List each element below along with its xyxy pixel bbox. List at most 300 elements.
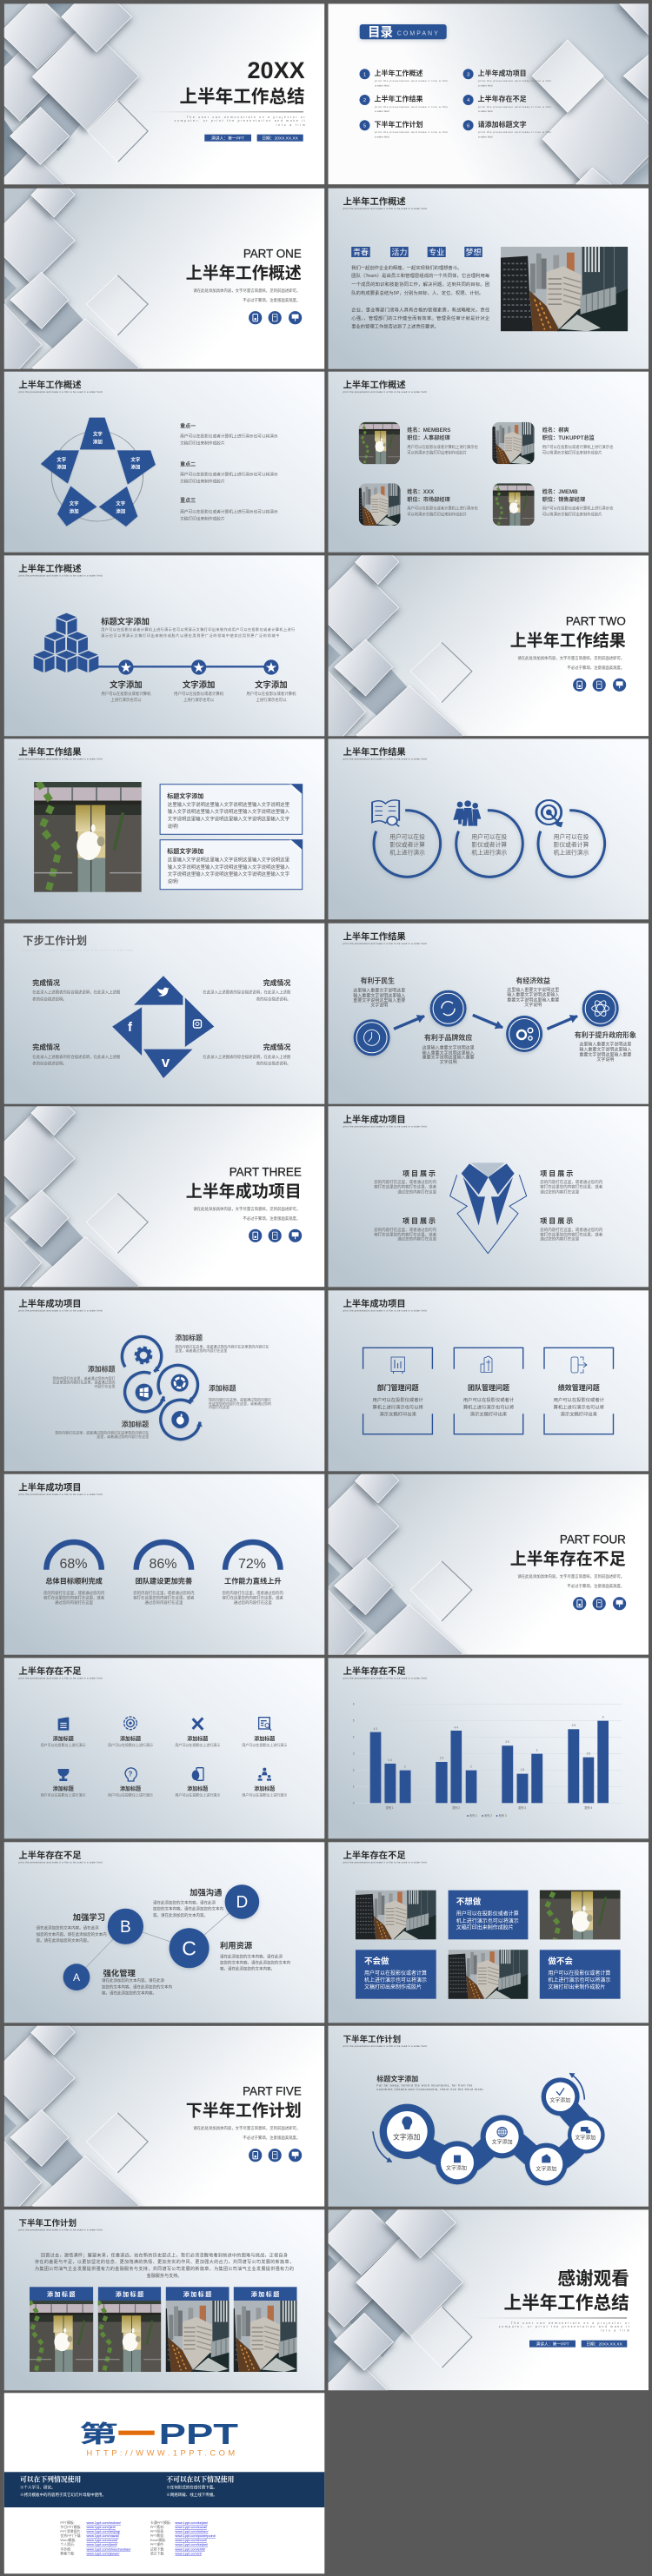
heading: print the presentation and make it a film to be used in a wider field <box>23 948 134 951</box>
panel: linked rings slide <box>4 1290 324 1471</box>
member details: 用户可以在投影仪或者计算机上进行演示也 <box>407 506 479 511</box>
icon titles <box>53 1735 275 1792</box>
flow labels: 输入重要文字说明这里输入 <box>507 992 559 998</box>
flow labels: 有利于品牌效应 <box>424 1033 472 1042</box>
contents items: print the presentation and make it into a film <box>375 105 448 109</box>
card text <box>373 1383 605 1417</box>
part heading: 上半年成功项目 <box>186 1181 302 1201</box>
background <box>329 924 649 1104</box>
heading: 上半年工作概述 <box>19 379 82 390</box>
gauge titles: 工作能力直线上升 <box>224 1577 282 1586</box>
circle labels: 加强沟通 <box>190 1887 223 1897</box>
resource links: PPT素材: <box>150 2525 164 2529</box>
resource links: 教案下载: <box>60 2551 75 2555</box>
contents items: 上半年成功项目 <box>478 69 527 77</box>
heading <box>19 1850 103 1864</box>
suit illustration <box>450 1162 527 1254</box>
resource links: www.1ppt.com/zt/ <box>175 2551 203 2555</box>
status text: 完成情况 <box>32 1043 60 1051</box>
intro paragraph: 为集团公司油气主业发展提供强有力的金融服务与支持，共同谱写公司发展的新篇章，为集团公司油气主业发展提供强有力的 <box>35 2266 294 2272</box>
blue card: 不会做: 用户可以在投影仪或者计算 <box>364 1970 427 1977</box>
gauge titles: 总体目标顺利完成 <box>45 1577 103 1586</box>
panel: three rings slide <box>329 738 649 919</box>
ring labels: 这里，或者通过您的内容打在这里 <box>96 1434 149 1439</box>
text box one: 标题文字添加 <box>167 792 203 799</box>
cover year: 20XX <box>248 57 305 83</box>
key points text: 用户可以在投影仪或者计算机上进行演示也可以将演示 <box>180 434 278 440</box>
presenter badges: 日期：20XX.XX.XX <box>262 136 299 141</box>
flow labels: 输入重要文字说明这里输入 <box>579 1047 631 1053</box>
blue card: 做不会: 机上进行演示也可以将演示 <box>548 1977 610 1983</box>
path text: Far far away, behind the word mountains, far from the <box>376 2084 472 2088</box>
part heading <box>510 614 626 650</box>
heading: 下半年工作计划 <box>19 2218 77 2228</box>
circle labels: 请在此添加您的文本内容。请在此添 <box>220 1953 283 1959</box>
contents items: 上半年工作结果 <box>374 95 422 103</box>
heading <box>19 1298 103 1312</box>
pentagon chart: 文字 <box>130 456 141 463</box>
blue card: 做不会: 做不会 <box>548 1957 573 1967</box>
keyword tags: 青春 <box>353 247 369 256</box>
member details: 可以将演示文稿打印出来制作成胶片 <box>542 511 602 518</box>
blue card: 做不会: 用户可以在投影仪或者计算 <box>548 1970 610 1977</box>
gauge descriptions: 容打在这里您的内容打在这里，或者 <box>43 1595 105 1601</box>
project text: 容打在这里您的内容打在这里，或者 <box>374 1184 437 1190</box>
blue card: 不会做: 机上进行演示也可以将演示 <box>364 1977 427 1983</box>
circle labels: 加您的文本内容。请在此添加您的文本内 <box>220 1960 290 1966</box>
ring text: 用户可以在投 <box>554 832 589 840</box>
key points text: 重点一 <box>180 422 196 429</box>
circle labels: 请在此添加您的文本内容。请在此添 <box>37 1925 99 1931</box>
contents items: 上半年存在不足 <box>478 95 527 103</box>
heading: print the presentation and make it a film to be used in a wider field <box>343 1308 427 1312</box>
gauge values <box>59 1557 266 1572</box>
heading: 上半年工作结果 <box>19 746 82 758</box>
heading: 上半年工作概述 <box>343 379 406 390</box>
cubes text: 标题文字添加 <box>101 617 150 626</box>
card text: 算机上进行演示也可以将 <box>463 1403 515 1410</box>
presenter badges <box>529 2341 627 2348</box>
part icons <box>249 311 302 324</box>
diamond background <box>309 2188 649 2424</box>
pentagon chart: 添加 <box>70 507 79 514</box>
part description: 不必过于繁琐，注意版面美观度。 <box>243 1215 300 1222</box>
timeline labels: 用户可以在投影仪或者计算机 <box>174 691 224 697</box>
background <box>329 189 649 369</box>
bar chart <box>353 1703 622 1810</box>
usage band: ※拷贝模板中的内容用于其它幻灯片母版中使用。 <box>20 2492 106 2498</box>
flow labels: 这里输入重要文字说明这里 <box>353 987 405 994</box>
panel: winding path slide <box>329 2026 649 2207</box>
icon grid: ? <box>129 1771 133 1778</box>
flow labels: 这里输入重要文字说明这里 <box>579 1042 631 1048</box>
contents items: 6 <box>467 123 469 129</box>
diamond background <box>0 0 324 218</box>
status text: 在此录入上述图表的综合描述说明，在此录入上述图 <box>203 1054 291 1060</box>
heading: 上半年工作结果 <box>343 930 406 942</box>
card text: 演示文稿打印出来 <box>561 1410 598 1417</box>
blue card: 不想做: 文稿打印出来制作成胶片 <box>456 1924 514 1930</box>
intro paragraph: 回首过去，激情满怀；展望未来，任重道远。站在新的历史起点上，我们必须清醒地看到前进中的困难与挑战，正视自身 <box>41 2252 288 2259</box>
heading: 上半年成功项目 <box>343 1114 406 1125</box>
path text: 标题文字添加 <box>376 2075 418 2083</box>
member details: 用户可以在投影仪或者计算机上进行演示也 <box>542 506 614 511</box>
part icons <box>249 2149 302 2162</box>
diamond background <box>329 0 652 203</box>
contents items: 5 <box>363 123 366 129</box>
status text: 表的综合描述说明。 <box>256 997 290 1003</box>
ring text: 用户可以在投 <box>471 832 507 840</box>
pentagon chart: 添加 <box>116 507 126 514</box>
background <box>329 2026 649 2207</box>
flow labels: 重要文字说明这里输入重要 <box>353 997 405 1003</box>
pentagon chart: 文字 <box>57 456 67 463</box>
project text: 通过您的内容打在这里 <box>540 1236 580 1242</box>
panel: part two slide <box>290 540 649 785</box>
resource links: Excel模板: <box>150 2538 166 2542</box>
background <box>4 1658 324 1838</box>
chart legend: 系列 1 <box>469 1813 477 1818</box>
resource links: 优秀PPT下载: <box>60 2533 82 2538</box>
cubes text: 用户可以在投影仪或者计算机上进行演示也可以将演示文稿打印出来制作成用户可以在投影仪或者计算机上进行 <box>101 626 295 632</box>
timeline labels: 文字添加 <box>255 680 288 690</box>
heading <box>343 195 427 210</box>
circle labels: 请在此添加您的文本内容。请在此添 <box>153 1900 216 1906</box>
heading: print the presentation and make it a film to be used in a wider field <box>19 1308 103 1312</box>
member details: 职位：TUKUPPT总监 <box>542 434 595 441</box>
text box one: 说明! <box>168 823 179 830</box>
heading <box>343 379 427 394</box>
english tagline: into a film <box>601 2328 629 2332</box>
icon: target <box>536 800 563 827</box>
part description: 不必过于繁琐，注意版面美观度。 <box>243 2135 300 2141</box>
project text: 通过您的内容打在这里 <box>397 1236 437 1242</box>
ring text: 用户可以在投 <box>389 832 425 840</box>
ring labels: 您的内容打在这里，或者通过您的内容打在这里您的内容打在 <box>55 1430 149 1435</box>
resource links: 卡通PPT模板: <box>150 2520 171 2525</box>
text box two <box>160 840 303 890</box>
divider <box>143 111 303 112</box>
presenter badges: 日期：20XX.XX.XX <box>586 2342 623 2348</box>
contents items: 1 <box>363 72 366 77</box>
status text: 在此录入上述图表的综合描述说明，在此录入上述图 <box>32 1054 121 1060</box>
lettered circles: D <box>236 1894 248 1912</box>
part description <box>193 2125 300 2141</box>
diamond background <box>0 1090 324 1335</box>
panel: thank you slide <box>309 2188 649 2424</box>
part icons <box>573 679 626 692</box>
background <box>329 1290 649 1471</box>
resource links: www.1ppt.com/tubiao/ <box>175 2529 209 2533</box>
member photos <box>358 422 535 526</box>
blue card: 做不会: 文稿打印出来制作成胶片 <box>548 1983 605 1990</box>
paragraph: 一个成员的知识和技能协同工作，解决问题，达到共同的目标。团 <box>351 281 489 288</box>
icon titles: 添加标题 <box>254 1785 275 1792</box>
heading: print the presentation and make it a film to be used in a wider field <box>343 390 427 394</box>
part heading: PART FIVE <box>243 2085 302 2098</box>
bar chart: 类别 1 <box>386 1805 394 1810</box>
gauge descriptions: 容打在这里您的内容打在这里，或者 <box>223 1595 284 1601</box>
diamond background <box>0 172 324 417</box>
lettered circles <box>63 1884 259 1990</box>
gauge values: 72% <box>238 1557 266 1572</box>
heading: 上半年成功项目 <box>343 1298 406 1309</box>
gauge descriptions <box>43 1590 284 1606</box>
bar chart: 类别 4 <box>584 1805 593 1810</box>
flow labels: 有经济效益 <box>516 976 550 984</box>
blue card: 不会做: 不会做 <box>364 1957 389 1967</box>
part heading: PART THREE <box>230 1165 302 1178</box>
flow labels: 重要文字说明这里输入重要 <box>579 1051 631 1057</box>
flow labels: 文字说明 <box>440 1059 457 1065</box>
bar chart: 0 <box>353 1801 355 1805</box>
blue card: 做不会 <box>540 1950 621 1999</box>
part description <box>517 1573 624 1589</box>
gauge descriptions: 容打在这里您的内容打在这里，或者 <box>133 1595 195 1601</box>
circle labels: 加强学习 <box>73 1912 105 1922</box>
blue card: 不想做 <box>449 1891 528 1939</box>
resource links: 个人简历: <box>60 2542 75 2546</box>
winding path diagram: 文字添加 <box>575 2134 595 2141</box>
resource links: www.1ppt.com/xiazai/ <box>87 2533 120 2538</box>
flow labels: 文字说明 <box>370 1003 388 1009</box>
social diamond <box>112 976 214 1078</box>
process circles <box>354 990 619 1056</box>
panel: part one slide <box>0 172 324 417</box>
resource links: www.1ppt.com/moban/ <box>87 2520 122 2525</box>
connector lines <box>77 1902 242 1977</box>
resource links: www.1ppt.com/jieri/ <box>87 2525 116 2529</box>
logo <box>79 2418 238 2450</box>
part heading: 上半年工作结果 <box>510 630 626 650</box>
project text: 项目展示 <box>403 1217 437 1225</box>
intro paragraph: 存在的差距与不足，以更加坚定的信念、更加饱满的热情、更加务实的作风、更加强大的合力，共同谱写公司发展的新篇章， <box>35 2259 294 2265</box>
project text: 容打在这里您的内容打在这里，或者 <box>540 1231 603 1237</box>
contents items: a wider field <box>478 83 493 87</box>
heading: print the presentation and make it a film to be used in a wider field <box>19 2228 103 2231</box>
resource links: PPT背景图片: <box>60 2529 82 2533</box>
logo: PPT <box>159 2418 238 2450</box>
rotation arrows <box>373 2073 584 2162</box>
project text: 项目展示 <box>540 1170 575 1178</box>
contents items: a wider field <box>478 109 493 113</box>
paragraph: 心强，，管理部门的工作健全而有效率。管理责任审计就是针对企 <box>351 315 490 321</box>
part heading: 上半年工作概述 <box>186 263 302 283</box>
english tagline: computer, or print the presentation and make it <box>175 119 305 123</box>
heading <box>343 1298 427 1312</box>
heading <box>23 934 134 951</box>
icon titles: 添加标题 <box>187 1785 208 1792</box>
part heading <box>186 1165 302 1201</box>
part heading <box>510 1533 626 1569</box>
heading: 上半年存在不足 <box>19 1850 82 1861</box>
panel: copyright slide <box>4 2393 324 2573</box>
panel: team overview slide <box>329 189 649 369</box>
bar chart: 类别 3 <box>518 1805 526 1810</box>
timeline labels: 文字添加 <box>110 680 143 690</box>
heading: 上半年工作概述 <box>343 195 406 207</box>
part heading: PART ONE <box>243 248 302 261</box>
heading <box>343 1114 427 1128</box>
heading: print the presentation and make it a film to be used in a wider field <box>19 1860 103 1864</box>
heading: print the presentation and make it a film to be used in a wider field <box>343 2044 427 2048</box>
background <box>4 1842 324 2023</box>
resource links <box>60 2520 216 2555</box>
usage band: ※任何形式的在线付费下载。 <box>166 2485 217 2491</box>
panel: part five slide <box>0 2010 324 2255</box>
icon titles: 添加标题 <box>120 1785 141 1792</box>
logo: 一 <box>118 2421 155 2447</box>
ring labels: 添加标题 <box>88 1364 116 1373</box>
project text: 通过您的内容打在这里 <box>397 1189 437 1195</box>
flow labels: 有利于民生 <box>361 977 395 985</box>
part description: 请在此处添加具体内容，文字尽量言简意赅，见到前面述即可。 <box>193 1206 300 1212</box>
lettered circles: A <box>73 1971 80 1983</box>
flow labels: 输入重要文字说明这里输入 <box>422 1050 475 1056</box>
card text: 用户可以在投影仪或者计 <box>463 1396 515 1403</box>
member details <box>407 427 614 518</box>
grid photos <box>356 1875 621 2001</box>
key points text: 用户可以在投影仪或者计算机上进行演示也可以将演示 <box>180 508 278 514</box>
heading <box>19 563 103 577</box>
cubes text: 演示也可以将演示文稿打印出来制作成胶片以便应用到更广泛的领域中使其应用到更广泛的领域中 <box>101 632 279 638</box>
member details: 姓名：JMEMB <box>542 488 578 495</box>
circle labels: 容。请在此添加您的文本内容。 <box>37 1937 91 1944</box>
resource links: PPT教程: <box>150 2533 164 2538</box>
resource links: PPT模板: <box>60 2520 75 2525</box>
thank you title: 上半年工作总结 <box>504 2294 629 2313</box>
heading: print the presentation and make it a film to be used in a wider field <box>343 1676 427 1679</box>
icon grid <box>58 1717 271 1781</box>
card text: 算机上进行演示也可以将 <box>554 1403 605 1410</box>
flow arrows <box>394 1015 577 1029</box>
project text: 您的内容打在这里，或者通过您的内 <box>374 1227 437 1233</box>
background <box>4 924 324 1104</box>
resource links: www.1ppt.com/word/ <box>87 2538 118 2542</box>
part description <box>193 288 300 303</box>
card headers: 添加标题 <box>251 2290 281 2298</box>
resource links: 手抄报: <box>60 2546 71 2551</box>
key points text: 文稿打印出来制作成胶片 <box>180 515 225 521</box>
chart legend: 系列 2 <box>484 1813 492 1818</box>
panel: table of contents slide <box>329 0 652 203</box>
ring text: 影仪或者计算 <box>389 840 425 848</box>
key points text: 文稿打印出来制作成胶片 <box>180 479 225 485</box>
blue card: 不想做: 用户可以在投影仪或者计算 <box>456 1910 519 1917</box>
card text: 演示文稿打印出来 <box>470 1410 508 1417</box>
contents items: a wider field <box>375 83 389 87</box>
contents items: a wider field <box>478 136 493 139</box>
heading: print the presentation and make it a film to be used in a wider field <box>343 942 427 945</box>
heading: 上半年工作结果 <box>343 746 406 758</box>
contents badge: COMPANY <box>397 31 438 36</box>
card headers: 添加标题 <box>47 2290 77 2298</box>
gauge titles <box>45 1577 282 1586</box>
ring labels: 内容打在这里 <box>94 1383 115 1388</box>
resource links: www.1ppt.com/kejian/ <box>175 2542 209 2546</box>
icon titles: 添加标题 <box>53 1735 74 1742</box>
heading: 上半年存在不足 <box>343 1850 406 1861</box>
status text: 在此录入上述图表的综合描述说明，在此录入上述图 <box>32 990 121 996</box>
circle labels: 加您的文本内容。请在此添加您的文本内 <box>102 1983 172 1990</box>
presenter badges <box>204 135 303 142</box>
usage band <box>4 2472 324 2507</box>
status text: 在此录入上述图表的综合描述说明，在此录入上述图 <box>203 990 291 996</box>
contents badge <box>360 24 447 40</box>
english tagline: computer, or print the presentation and make it <box>499 2325 629 2328</box>
icon captions: 用户可以在投影仪上进行演示 <box>175 1792 220 1798</box>
heading: 上半年成功项目 <box>19 1298 82 1309</box>
keyword tags: 专业 <box>429 247 444 256</box>
heading <box>343 746 427 760</box>
heading <box>343 1850 427 1864</box>
icon titles: 添加标题 <box>254 1735 275 1742</box>
lettered circles: B <box>120 1918 131 1937</box>
bar chart: 2 <box>404 1765 406 1769</box>
chart legend: 系列 3 <box>499 1813 507 1818</box>
resource links: www.1ppt.com/jiaoan/ <box>87 2551 120 2555</box>
panel: cover slide <box>0 0 324 218</box>
city photo <box>501 247 628 331</box>
icon titles: 添加标题 <box>53 1785 74 1792</box>
key points text: 重点三 <box>180 497 196 504</box>
pentagon chart: 添加 <box>130 464 141 471</box>
card frames <box>363 1348 614 1434</box>
flow labels: 输入重要文字说明这里输入 <box>353 992 405 998</box>
panel: ABCD circles slide <box>4 1842 324 2023</box>
flow labels <box>353 976 636 1065</box>
heading <box>343 930 427 945</box>
part description: 不必过于繁琐，注意版面美观度。 <box>567 1583 624 1589</box>
ring labels: 添加标题 <box>175 1333 203 1341</box>
timeline labels: 用户可以在投影仪或者计算机 <box>246 691 296 697</box>
paragraph: 团队（Team）是由员工和管理层组成的一个共同体，它合理利用每 <box>351 272 490 279</box>
bar chart: 3 <box>353 1752 355 1756</box>
card text: 团队管理问题 <box>468 1383 509 1392</box>
intro paragraph <box>35 2252 294 2279</box>
bar chart: 2 <box>470 1765 472 1769</box>
resource links: www.1ppt.com/excel/ <box>175 2538 208 2542</box>
status text: 表的综合描述说明。 <box>32 997 67 1003</box>
resource links: www.1ppt.com/beijing/ <box>87 2529 121 2533</box>
bar chart: 6 <box>353 1703 355 1706</box>
timeline labels: 上进行演示也可以 <box>183 697 215 703</box>
heading: print the presentation and make it a film to be used in a wider field <box>343 1124 427 1128</box>
pentagon chart: 文字 <box>93 430 103 437</box>
part heading: 下半年工作计划 <box>186 2101 302 2121</box>
resource links: www.1ppt.com/shiti/ <box>175 2546 206 2551</box>
panel: management issues slide <box>329 1290 649 1471</box>
part description: 不必过于繁琐，注意版面美观度。 <box>567 665 624 671</box>
panel: star diagram slide <box>4 372 324 553</box>
timeline labels: 上进行演示也可以 <box>110 697 142 703</box>
timeline labels: 文字添加 <box>183 680 215 690</box>
icon titles: 添加标题 <box>120 1735 141 1742</box>
flow labels: 文字说明 <box>596 1056 614 1063</box>
flow labels: 重要文字说明这里输入重要 <box>422 1055 475 1061</box>
paragraph: 队的构成要素总结为5P，分别为目标、人、定位、权限、计划。 <box>351 289 483 296</box>
gauge values: 86% <box>149 1557 177 1572</box>
ring text: 影仪或者计算 <box>554 840 589 848</box>
member details: 职位：人事部经理 <box>407 434 451 441</box>
ring labels: 这里，或者通过您的内容打在这里 <box>175 1348 227 1353</box>
member details: 职位：销售部经理 <box>542 496 586 503</box>
circle labels: 加您的文本内容。请在此添加您的文本内 <box>153 1906 223 1912</box>
pentagon chart: 添加 <box>93 438 103 445</box>
text box one: 这里输入文字说明这里输入文字说明这里输入文字说明这里 <box>168 801 290 808</box>
member details: 姓名：XXX <box>407 488 435 495</box>
heading: 上半年存在不足 <box>343 1665 406 1677</box>
